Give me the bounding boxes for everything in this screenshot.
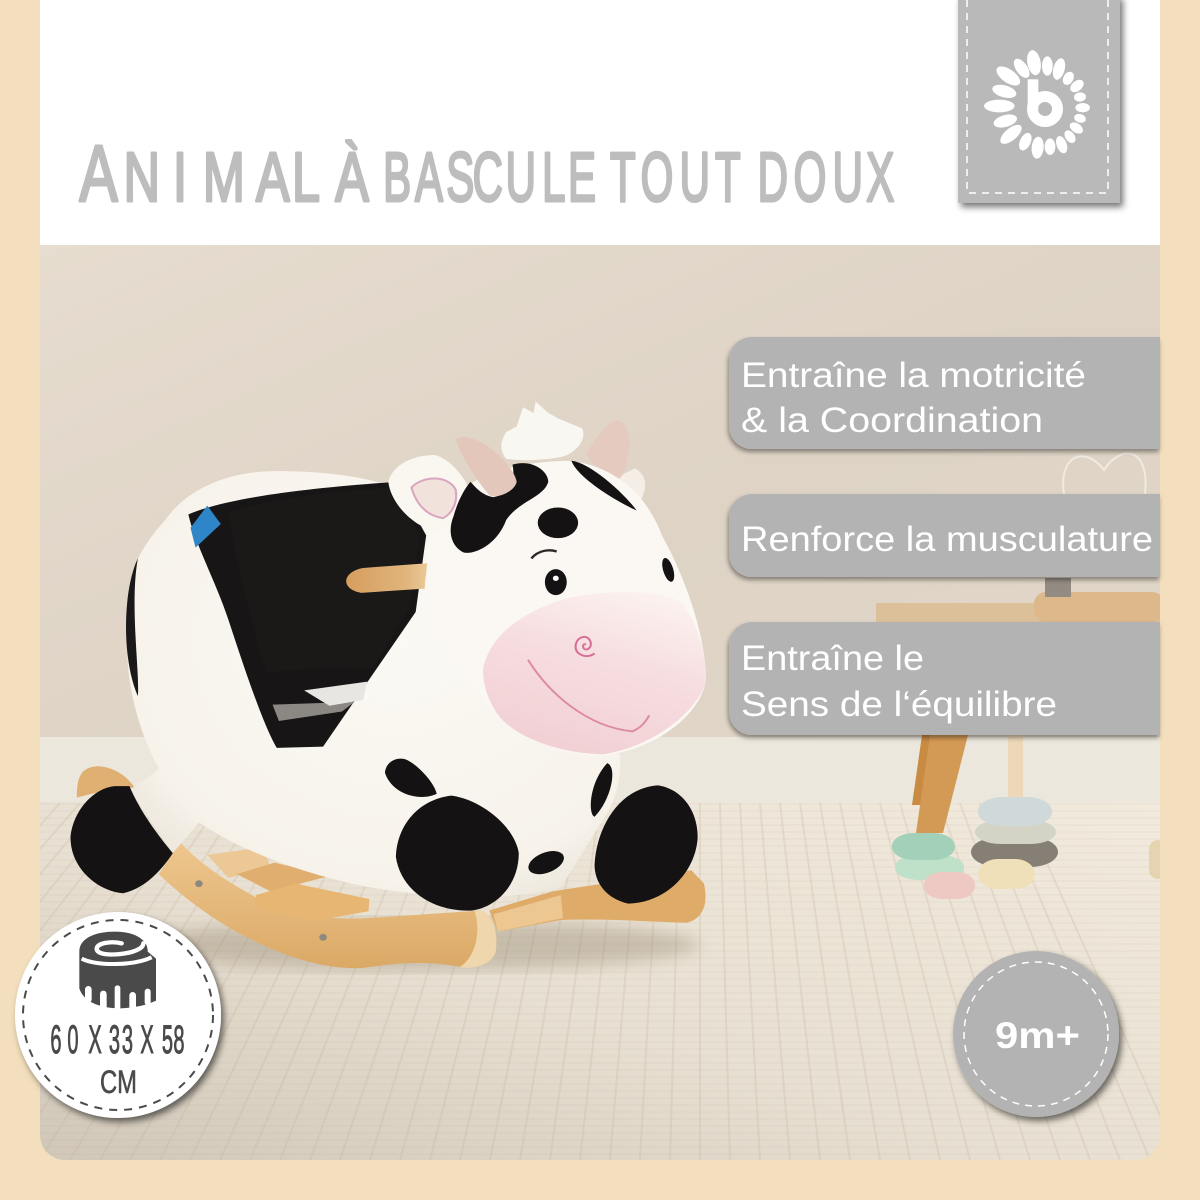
rear black patch [126, 558, 138, 696]
seat fabric highlight [228, 488, 420, 673]
product photo [0, 245, 1180, 1160]
carpet shadow under rocker [140, 920, 700, 970]
brow [531, 550, 557, 558]
right paw [595, 785, 698, 904]
rocking cow toy [71, 401, 706, 968]
dimensions badge: 60 X 33 X 58 [50, 1016, 185, 1062]
dimensions badge [15, 912, 221, 1118]
heading: ANIMAL [79, 129, 320, 218]
muzzle [483, 592, 706, 754]
blue tag [190, 506, 221, 548]
side table [876, 578, 1164, 833]
benefit pill: motricité: & la Coordination [741, 401, 1043, 440]
age badge [953, 951, 1119, 1117]
seat [188, 482, 426, 748]
left head patch [451, 463, 548, 553]
body [127, 471, 620, 897]
white title band [40, 0, 1160, 245]
wall [40, 245, 1160, 745]
seat strap [273, 702, 355, 721]
baseboard [40, 737, 1160, 803]
nostril [576, 637, 595, 656]
age badge: 9m+ [995, 1015, 1080, 1056]
heading: DOUX [758, 139, 894, 217]
benefit pill: équilibre: Entraîne le [741, 639, 924, 678]
benefit pill: équilibre: Sens de l‘équilibre [741, 685, 1057, 724]
heading: BASCULE [383, 139, 596, 217]
right head patch [571, 461, 637, 511]
back paw [71, 786, 173, 893]
right ear [619, 468, 645, 499]
left eye [545, 569, 567, 595]
front paw [396, 796, 519, 911]
brand tag [958, 0, 1120, 203]
benefit pill: musculature [729, 494, 1160, 577]
left ear [388, 455, 470, 532]
icon: flower logo [984, 49, 1090, 159]
icon: measuring tape [79, 932, 156, 1011]
smile [528, 660, 649, 731]
small head spot [538, 507, 578, 538]
wooden rocker [77, 766, 705, 968]
right eye [662, 558, 674, 582]
wire decoration [1063, 454, 1146, 494]
carpet [0, 802, 1180, 1160]
body spots [385, 759, 437, 797]
tuft [501, 401, 583, 460]
benefit pill: motricité [729, 337, 1160, 449]
right horn [586, 420, 630, 480]
heading: TOUT [610, 139, 741, 217]
heading: À [335, 138, 369, 216]
stacking toy [892, 735, 1167, 899]
heading [79, 129, 894, 218]
dimensions badge: CM [100, 1064, 137, 1100]
benefit pill: musculature: Renforce la musculature [741, 520, 1153, 559]
left horn [456, 437, 517, 496]
head [425, 461, 706, 755]
benefit pill: motricité: Entraîne la motricité [741, 356, 1086, 395]
wooden handle [346, 563, 430, 593]
benefit pill: équilibre [729, 622, 1160, 735]
